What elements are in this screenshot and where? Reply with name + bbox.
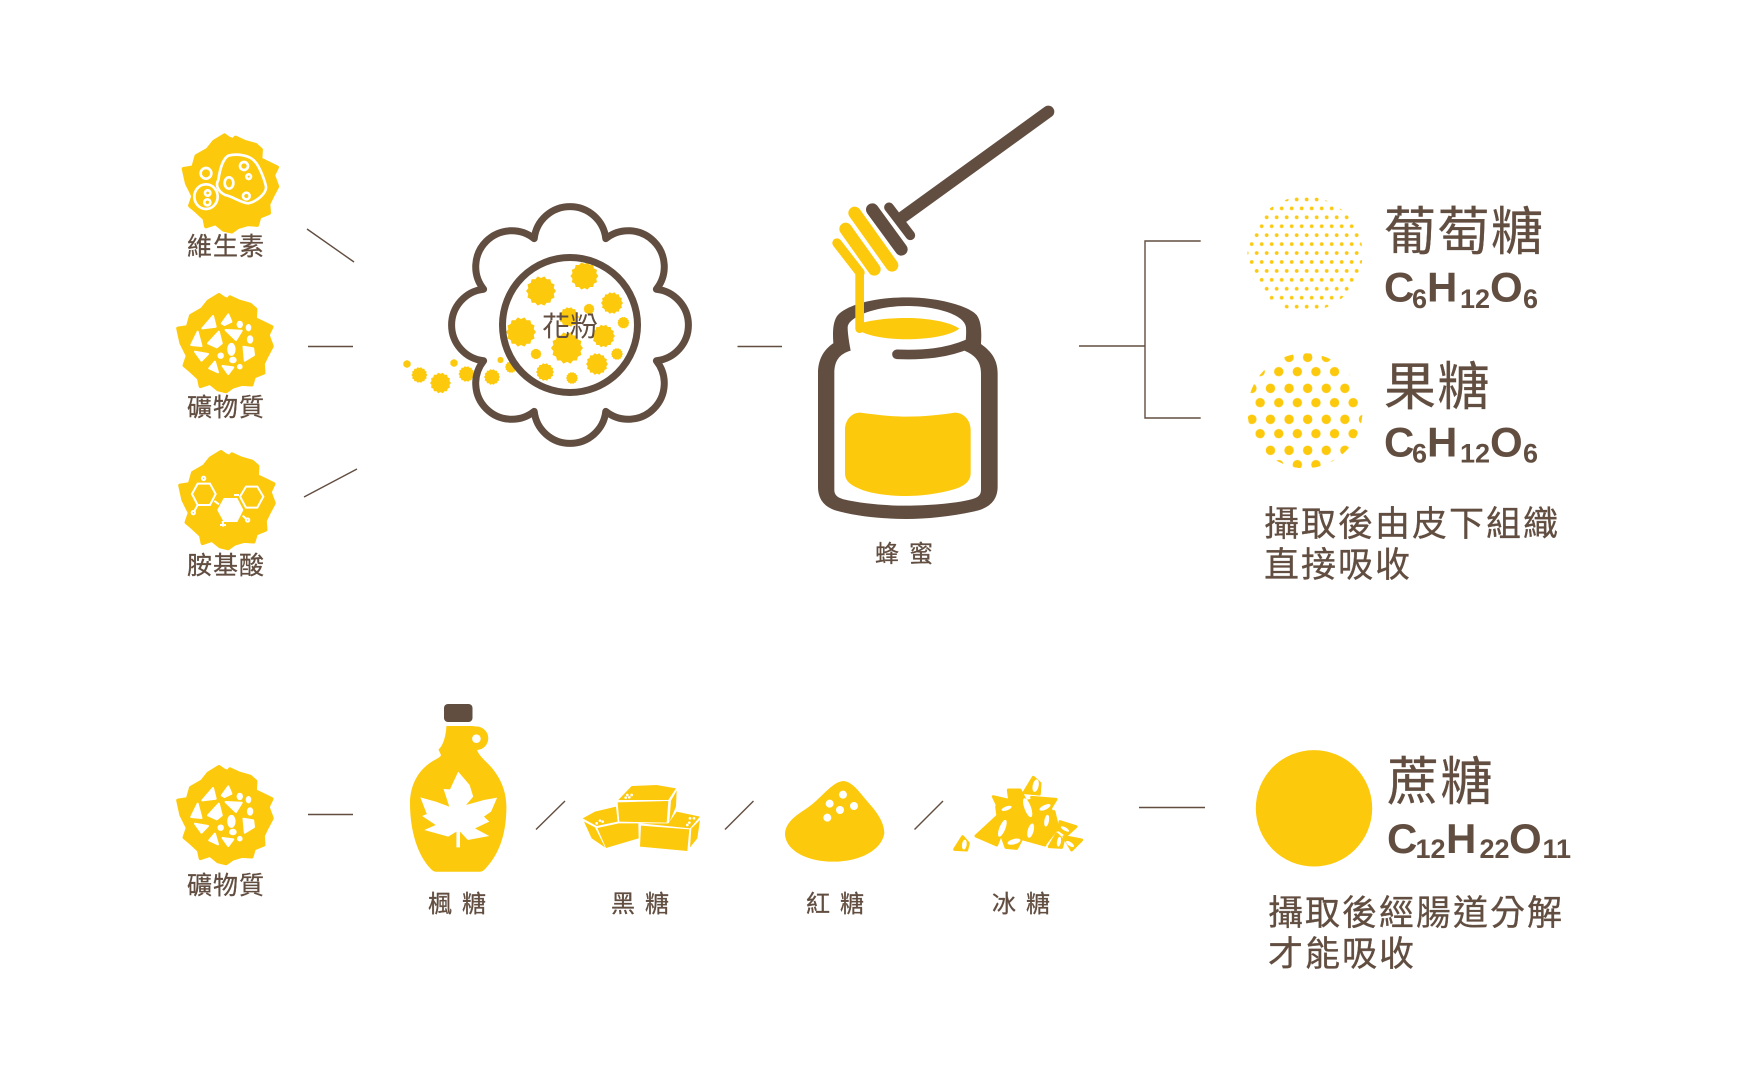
jar [818,297,998,519]
label: rock sugar: 冰糖 [992,891,1060,918]
formula: fructose: C [1384,419,1414,466]
sucrose solid circle [1256,750,1372,866]
flower with pollen [403,207,688,443]
connector: pollen to honey [738,346,782,348]
icon: minerals blob bottom row [178,767,272,863]
formula: sucrose: 11 [1542,834,1571,864]
label: minerals: 礦物質 [187,394,265,422]
formula: sucrose: O [1509,815,1542,862]
icon: amino acids blob [180,452,274,548]
icon: brown sugar mound [785,781,884,862]
formula: sucrose: 22 [1480,834,1510,864]
icon: minerals blob [178,295,272,391]
connector: amino acids to pollen [304,469,357,497]
label: vitamins: 維生素 [187,233,265,261]
bracket connector [1079,241,1201,418]
label: black sugar: 黑糖 [611,891,679,918]
heading: fructose: 果糖 [1384,359,1491,417]
formula: fructose: 6 [1523,439,1538,469]
formula: glucose: 12 [1460,284,1490,314]
connector: maple to black sugar [536,801,565,830]
honey dipper [837,112,1048,329]
label: brown sugar: 紅糖 [806,891,874,918]
fructose coarse dot circle [1247,353,1363,468]
formula: sucrose: H [1446,815,1476,862]
description: glucose and fructose absorption: 攝取後由皮下組織 [1264,505,1560,544]
icon: maple syrup bottle [410,704,506,872]
formula: glucose: H [1427,264,1457,311]
icon: rock sugar pile [955,777,1082,850]
heading: glucose: 葡萄糖 [1384,204,1545,262]
formula: fructose: 6 [1412,439,1427,469]
connector: brown to rock sugar [914,801,943,830]
flower outline [452,207,688,443]
formula: glucose: O [1490,264,1523,311]
formula: fructose: 12 [1460,439,1490,469]
formula: fructose: O [1490,419,1523,466]
heading: sucrose: 蔗糖 [1387,754,1494,812]
formula: fructose: H [1427,419,1457,466]
label: minerals bottom row: 礦物質 [187,872,265,900]
connector: vitamins to pollen [307,229,354,262]
formula: glucose: 6 [1523,284,1538,314]
formula: glucose: 6 [1412,284,1427,314]
description: glucose and fructose absorption: 直接吸收 [1264,546,1412,585]
connector: black to brown sugar [725,801,754,830]
description: sucrose absorption: 攝取後經腸道分解 [1268,894,1564,933]
connector: minerals to pollen [308,346,353,348]
glucose fine dot circle [1247,196,1363,312]
formula: sucrose: C [1387,815,1417,862]
description: sucrose absorption: 才能吸收 [1268,935,1416,974]
label: maple sugar: 楓糖 [428,891,496,918]
label: honey: 蜂蜜 [875,541,943,568]
icon: honey jar and dipper [818,112,1048,519]
icon: vitamins blob [184,135,277,232]
label: amino acids: 胺基酸 [187,552,265,580]
pollen grains [403,262,629,393]
icon: black sugar cubes [583,785,700,851]
connector: rock sugar to sucrose [1139,806,1205,808]
connector: minerals to maple syrup [308,814,353,816]
flower centre ring [502,258,638,392]
formula: glucose: C [1384,264,1414,311]
label: pollen: 花粉 [542,311,598,342]
formula: sucrose: 12 [1416,834,1446,864]
